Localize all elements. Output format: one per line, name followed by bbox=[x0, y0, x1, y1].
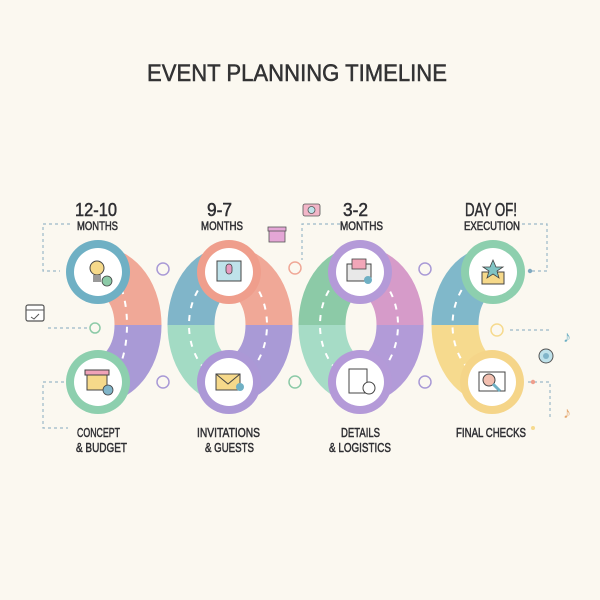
icon: gift bbox=[268, 227, 286, 242]
label: 12-10 months: MONTHS bbox=[77, 219, 118, 233]
label: 12-10 months: 12-10 bbox=[75, 200, 117, 220]
label: details & logistics bbox=[329, 425, 391, 455]
band: column 4 left arc bbox=[453, 270, 493, 380]
label: 12-10 months bbox=[75, 200, 118, 233]
title: EVENT PLANNING TIMELINE bbox=[147, 60, 447, 87]
label: final checks: FINAL CHECKS bbox=[456, 425, 526, 440]
label: invitations & guests: INVITATIONS bbox=[197, 425, 260, 440]
label: 3-2 months bbox=[340, 200, 383, 233]
icon: calendar bbox=[26, 305, 44, 321]
circle: execution top (star) bbox=[461, 240, 525, 304]
band: column 2 O loop bbox=[189, 270, 269, 380]
circle: invitations bottom (envelope) bbox=[197, 350, 261, 414]
circle: concept bottom (gift) bbox=[66, 350, 130, 414]
label: 3-2 months: MONTHS bbox=[340, 219, 383, 233]
label: 9-7 months: MONTHS bbox=[201, 219, 243, 233]
circle: details bottom (clipboard) bbox=[328, 350, 392, 414]
label: details & logistics: DETAILS bbox=[341, 425, 380, 440]
label: day of: DAY OF! bbox=[465, 200, 517, 220]
label: concept & budget: CONCEPT bbox=[77, 425, 120, 440]
label: day of bbox=[464, 200, 520, 233]
label: day of: EXECUTION bbox=[464, 219, 520, 233]
icon: music notes and disc bbox=[539, 329, 571, 422]
label: concept & budget bbox=[76, 425, 127, 455]
icon: camera bbox=[303, 204, 320, 216]
circle: concept top (lightbulb) bbox=[66, 240, 130, 304]
circle: final checks bottom (calendar search) bbox=[460, 350, 524, 414]
label: concept & budget: & BUDGET bbox=[76, 440, 127, 455]
label: 9-7 months bbox=[201, 200, 243, 233]
circle: details top (mail) bbox=[328, 240, 392, 304]
label: details & logistics: & LOGISTICS bbox=[329, 440, 391, 455]
band: column 3 O loop bbox=[320, 270, 400, 380]
band: column 1 right arc bbox=[98, 270, 138, 380]
connectors (dashed lines) bbox=[43, 224, 550, 428]
label: 9-7 months: 9-7 bbox=[207, 200, 232, 220]
label: invitations & guests: & GUESTS bbox=[205, 440, 254, 455]
icon: music notes and disc: ♪ bbox=[563, 329, 571, 346]
icon: music notes and disc: ♪ bbox=[563, 405, 571, 422]
small ring markers bbox=[90, 262, 503, 388]
circle: invitations top (podium) bbox=[197, 240, 261, 304]
label: invitations & guests bbox=[197, 425, 260, 455]
label: 3-2 months: 3-2 bbox=[343, 200, 368, 220]
